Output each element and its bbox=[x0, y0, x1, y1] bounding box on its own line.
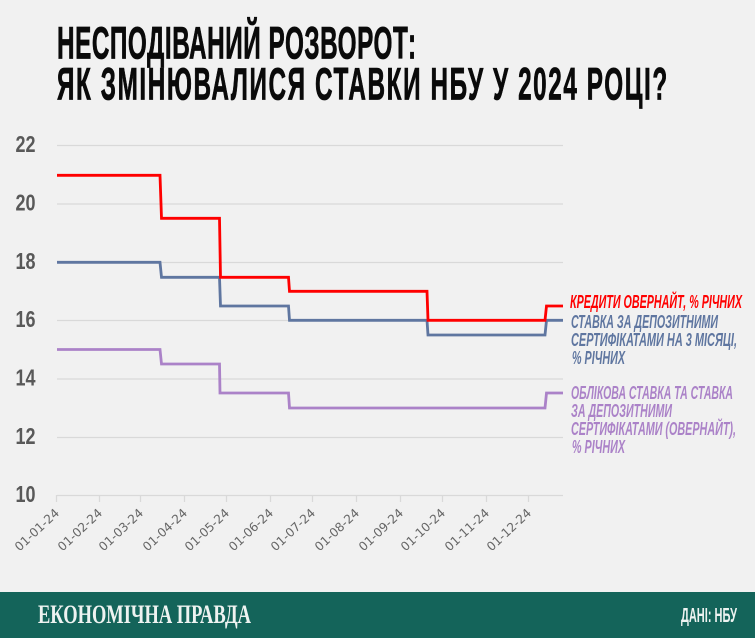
y axis labels: 12 bbox=[16, 423, 36, 449]
y axis labels: 14 bbox=[16, 364, 36, 390]
x axis labels: 01-08-24 bbox=[312, 506, 362, 554]
line chart bbox=[12, 131, 563, 554]
y axis labels: 16 bbox=[16, 306, 36, 332]
y axis labels bbox=[16, 131, 36, 507]
title: НЕСПОДІВАНИЙ РОЗВОРОТ: bbox=[57, 16, 416, 68]
y axis labels: 10 bbox=[16, 481, 36, 507]
title: ЯК ЗМІНЮВАЛИСЯ СТАВКИ НБУ У 2024 РОЦІ? bbox=[57, 58, 667, 109]
series: 3-month certificates bbox=[57, 262, 563, 335]
label: discount rate bbox=[571, 383, 736, 457]
x axis labels: 01-05-24 bbox=[182, 506, 232, 554]
title bbox=[57, 16, 667, 109]
logo: ЕКОНОМІЧНА ПРАВДА bbox=[38, 600, 251, 629]
x axis labels: 01-06-24 bbox=[226, 506, 276, 554]
x axis labels: 01-02-24 bbox=[55, 506, 105, 554]
label: 3-month certificates: % РІЧНИХ bbox=[572, 348, 626, 368]
x axis labels: 01-01-24 bbox=[12, 506, 62, 554]
x axis labels: 01-10-24 bbox=[398, 506, 448, 554]
x axis labels: 01-12-24 bbox=[484, 506, 534, 554]
series: overnight credit bbox=[57, 175, 563, 320]
label: discount rate: ЗА ДЕПОЗИТНИМИ bbox=[571, 401, 673, 421]
y axis labels: 22 bbox=[16, 131, 36, 157]
x axis labels: 01-09-24 bbox=[356, 506, 406, 554]
label: discount rate: % РІЧНИХ bbox=[572, 437, 626, 457]
series: discount rate bbox=[57, 350, 563, 408]
x axis labels: 01-03-24 bbox=[96, 506, 146, 554]
x axis labels: 01-07-24 bbox=[268, 506, 318, 554]
y axis labels: 20 bbox=[16, 190, 36, 216]
footer bbox=[0, 592, 755, 638]
x axis labels: 01-11-24 bbox=[442, 506, 492, 554]
y axis labels: 18 bbox=[16, 248, 36, 274]
label: 3-month certificates bbox=[571, 312, 737, 368]
x axis labels bbox=[12, 506, 534, 554]
x axis labels: 01-04-24 bbox=[140, 506, 190, 554]
